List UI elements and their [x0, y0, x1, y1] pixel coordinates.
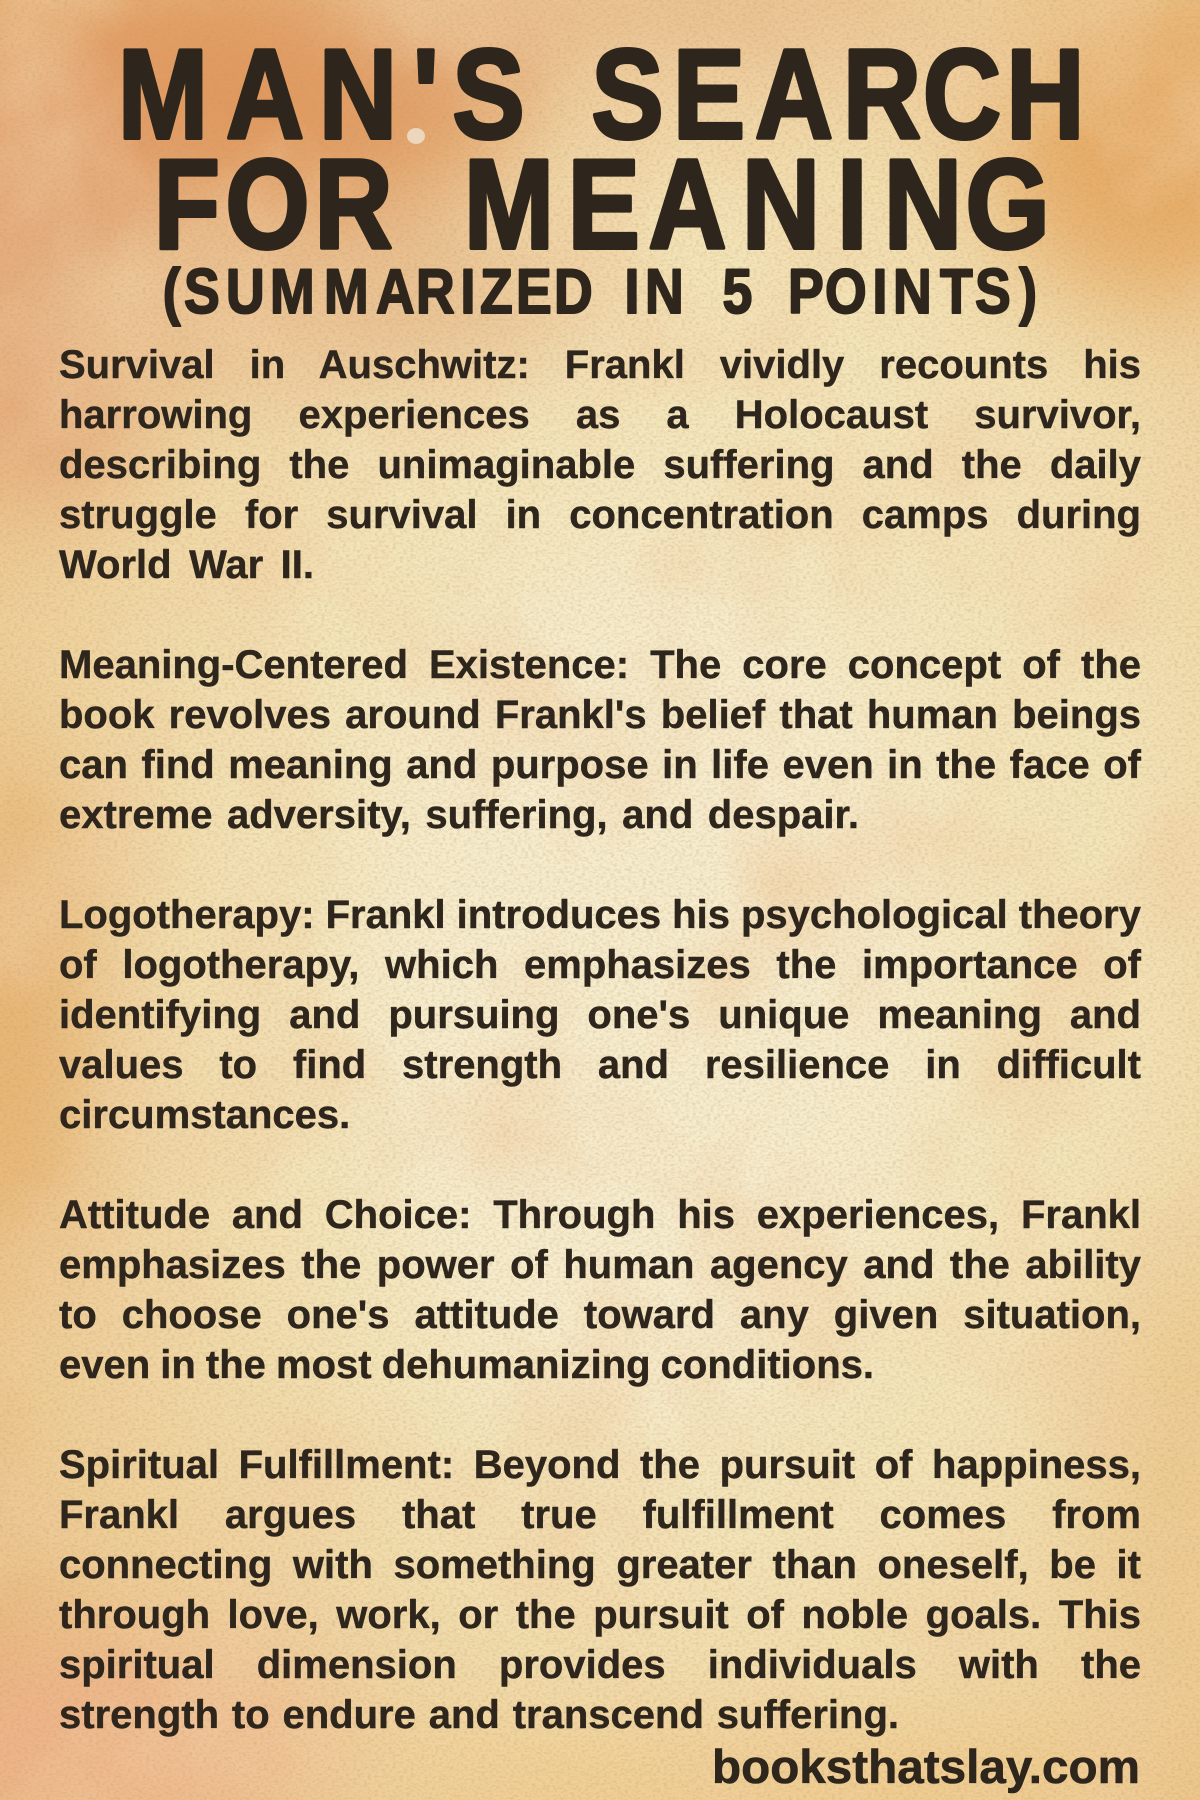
point 1: survival in Auschwitz: Survival in Auschwitz: Frankl vividly recounts his: [59, 343, 1141, 387]
point 3: logotherapy: identifying and pursuing one's unique meaning and: [59, 993, 1141, 1037]
point 1: survival in Auschwitz: harrowing experiences as a Holocaust survivor,: [59, 393, 1141, 437]
point 5: spiritual fulfillment: through love, work, or the pursuit of noble goals. This: [59, 1593, 1141, 1637]
subtitle: (SUMMARIZED IN 5 POINTS): [163, 257, 1037, 327]
point 1: survival in Auschwitz: describing the unimaginable suffering and the daily: [59, 443, 1141, 487]
point 5: spiritual fulfillment: connecting with something greater than oneself, be it: [59, 1543, 1141, 1587]
point 5: spiritual fulfillment: [59, 1443, 1141, 1737]
point 4: attitude and choice: Attitude and Choice: Through his experiences, Frankl: [59, 1193, 1141, 1237]
title block: [118, 23, 1084, 327]
point 3: logotherapy: circumstances.: [59, 1093, 350, 1137]
point 2: meaning-centered existence: can find meaning and purpose in life even in the face of: [59, 743, 1141, 787]
point 3: logotherapy: of logotherapy, which emphasizes the importance of: [59, 943, 1141, 987]
point 5: spiritual fulfillment: spiritual dimension provides individuals with the: [59, 1643, 1141, 1687]
point 2: meaning-centered existence: Meaning-Centered Existence: The core concept of the: [59, 643, 1141, 687]
title line 1: MAN'S SEARCH: [118, 23, 1084, 165]
point 3: logotherapy: values to find strength and resilience in difficult: [59, 1043, 1141, 1087]
point 2: meaning-centered existence: [59, 643, 1142, 837]
point 2: meaning-centered existence: extreme adversity, suffering, and despair.: [59, 793, 859, 837]
point 3: logotherapy: Logotherapy: Frankl introduces his psychological theory: [59, 893, 1141, 937]
footer website: booksthatslay.com: [712, 1740, 1140, 1793]
point 4: attitude and choice: emphasizes the power of human agency and the ability: [59, 1243, 1141, 1287]
point 4: attitude and choice: to choose one's attitude toward any given situation,: [59, 1293, 1141, 1337]
point 1: survival in Auschwitz: [58, 343, 1141, 587]
title line 2: FOR MEANING: [154, 133, 1050, 275]
point 2: meaning-centered existence: book revolves around Frankl's belief that human beings: [59, 693, 1141, 737]
point 1: survival in Auschwitz: World War II.: [59, 543, 314, 587]
point 1: survival in Auschwitz: struggle for survival in concentration camps during: [59, 493, 1141, 537]
point 4: attitude and choice: [59, 1193, 1141, 1387]
point 4: attitude and choice: even in the most dehumanizing conditions.: [59, 1343, 874, 1387]
body text: [58, 343, 1142, 1737]
point 5: spiritual fulfillment: strength to endure and transcend suffering.: [59, 1693, 899, 1737]
point 5: spiritual fulfillment: Spiritual Fulfillment: Beyond the pursuit of happiness,: [59, 1443, 1141, 1487]
point 5: spiritual fulfillment: Frankl argues that true fulfillment comes from: [59, 1493, 1141, 1537]
point 3: logotherapy: [58, 893, 1142, 1137]
